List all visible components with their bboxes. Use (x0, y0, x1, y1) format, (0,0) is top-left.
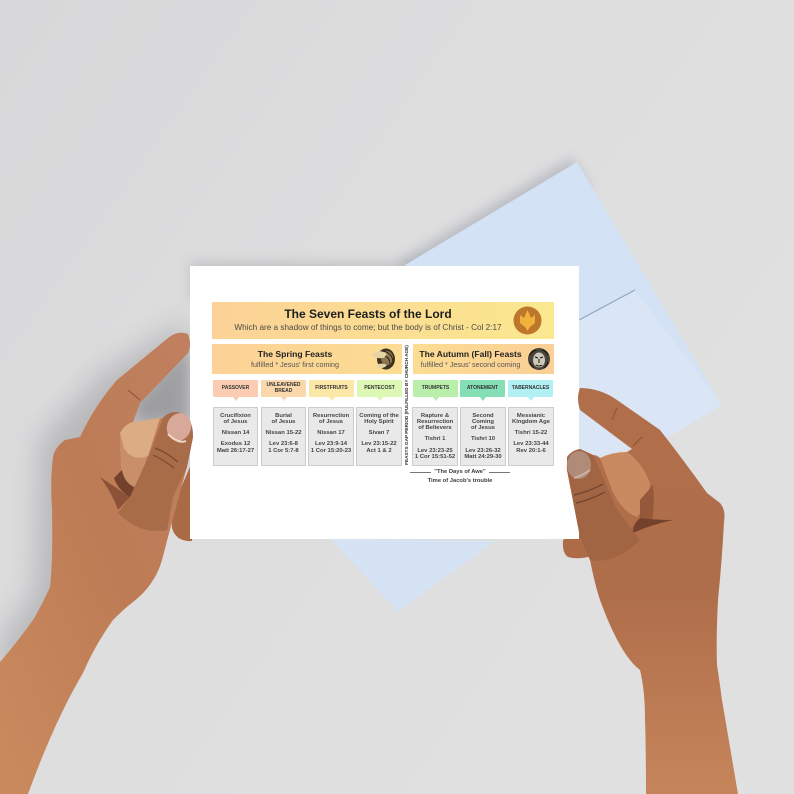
tag: trumpets: TRUMPETS (422, 385, 449, 391)
box: tabernacles details: Rev 20:1-6 (516, 448, 546, 454)
box: pentecost details: Lev 23:15-22 (361, 441, 397, 447)
tag: firstfruits: FIRSTFRUITS (315, 385, 348, 391)
box: tabernacles details (508, 407, 554, 466)
box: pentecost details: Coming of the (359, 412, 399, 418)
box: trumpets details (412, 407, 458, 466)
box: passover details: Nissan 14 (222, 430, 249, 436)
box: trumpets details: Rapture & (421, 412, 449, 418)
thumbnail (567, 451, 591, 479)
subtitle: Which are a shadow of things to come; but the body is of Christ - Col 2:17 (234, 323, 502, 332)
box: pentecost details: Holy Spirit (364, 419, 394, 425)
palm crease (100, 477, 130, 510)
box: firstfruits details: 1 Cor 15:20-23 (311, 448, 351, 454)
tag: passover: PASSOVER (222, 385, 249, 391)
gap period vertical label: FEASTS GAP PERIOD (FULFILLED BY CHURCH AGE) (404, 345, 409, 465)
thumb (118, 412, 193, 531)
days of awe note: "The Days of Awe" (434, 469, 486, 475)
box: pentecost details: Act 1 & 2 (366, 448, 392, 454)
box: atonement details: of Jesus (471, 425, 495, 431)
tag: unleavened bread: UNLEAVENED (266, 382, 301, 388)
box: trumpets details: 1 Cor 15:51-52 (415, 454, 455, 460)
spring subheading: fulfilled * Jesus' first coming (251, 360, 339, 369)
box: firstfruits details (308, 407, 354, 466)
thumb (567, 449, 640, 561)
box: passover details: Exodus 12 (221, 441, 250, 447)
tag: pentecost (357, 380, 402, 397)
box: unleavened bread details: Nissan 15-22 (265, 430, 302, 436)
box: unleavened bread details (261, 407, 306, 466)
autumn subheading: fulfilled * Jesus' second coming (421, 360, 520, 369)
box: unleavened bread details: 1 Cor 5:7-8 (268, 448, 299, 454)
box: passover details: of Jesus (224, 419, 247, 425)
tag: pentecost: PENTECOST (364, 385, 395, 391)
box: trumpets details: Tishri 1 (425, 436, 445, 442)
tag: tabernacles (508, 380, 553, 397)
box: trumpets details: Lev 23:23-25 (417, 448, 453, 454)
box: passover details (213, 407, 258, 466)
title banner (212, 302, 554, 339)
tag: tabernacles: TABERNACLES (512, 385, 549, 391)
box: firstfruits details: of Jesus (319, 419, 343, 425)
box: unleavened bread details: of Jesus (272, 419, 295, 425)
box: firstfruits details: Lev 23:9-14 (315, 441, 347, 447)
box: trumpets details: Resurrection (417, 419, 453, 425)
right hand (567, 388, 738, 794)
box: firstfruits details: Resurrection (313, 412, 349, 418)
panel: spring feasts header (212, 344, 402, 374)
tag: firstfruits (309, 380, 354, 397)
box: firstfruits details: Nissan 17 (317, 430, 345, 436)
box: pentecost details (356, 407, 402, 466)
days of awe note: Time of Jacob's trouble (428, 478, 492, 484)
box: pentecost details: Sivan 7 (369, 430, 389, 436)
panel: autumn feasts header (413, 344, 554, 374)
box: atonement details: Tishri 10 (471, 436, 495, 442)
thumbnail (163, 410, 195, 444)
tag: trumpets (413, 380, 458, 397)
box: passover details: Crucifixion (220, 412, 251, 418)
tag: unleavened bread (261, 380, 306, 397)
box: atonement details: Lev 23:26-32 (465, 448, 501, 454)
icon: lion (528, 348, 550, 370)
curled fingers (600, 452, 650, 517)
curled fingers (120, 418, 160, 490)
autumn heading: The Autumn (Fall) Feasts (419, 349, 522, 359)
tag: atonement (460, 380, 505, 397)
box: tabernacles details: Lev 23:33-44 (513, 441, 549, 447)
box: trumpets details: of Believers (418, 425, 452, 431)
box: tabernacles details: Messianic (517, 412, 545, 418)
icon: wheat emblem (514, 306, 542, 334)
box: passover details: Matt 26:17-27 (217, 448, 254, 454)
box: atonement details: Second (472, 412, 494, 418)
tag: atonement: ATONEMENT (467, 385, 498, 391)
box: tabernacles details: Kingdom Age (512, 419, 550, 425)
tag: unleavened bread: BREAD (275, 388, 292, 394)
tag: passover (213, 380, 258, 397)
box: atonement details: Coming (472, 419, 494, 425)
title: The Seven Feasts of the Lord (284, 307, 452, 321)
left hand (0, 333, 195, 794)
box: atonement details: Matt 24:29-30 (464, 454, 502, 460)
days of awe note (410, 469, 510, 484)
spring heading: The Spring Feasts (258, 349, 332, 359)
box: atonement details (460, 407, 506, 466)
icon: lamb (372, 348, 395, 370)
box: unleavened bread details: Lev 23:6-8 (269, 441, 298, 447)
card (190, 266, 579, 539)
palm crease (633, 518, 673, 533)
box: tabernacles details: Tishri 15-22 (515, 430, 547, 436)
box: unleavened bread details: Burial (275, 412, 292, 418)
